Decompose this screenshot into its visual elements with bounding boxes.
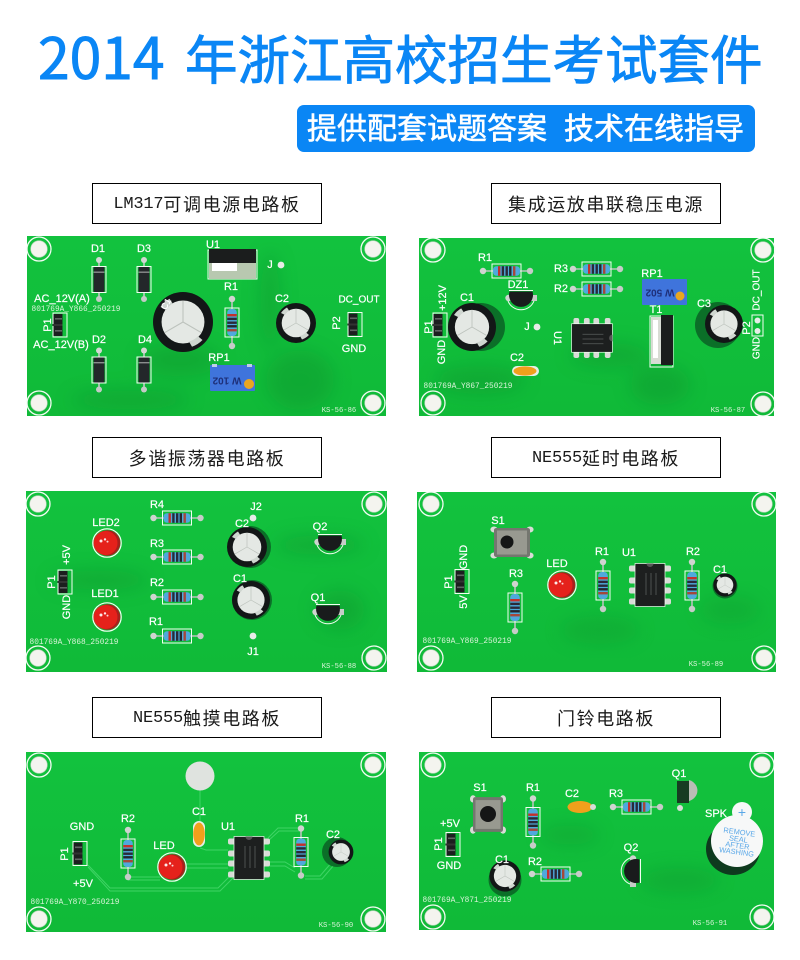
LED2	[92, 517, 121, 557]
timer U1	[221, 821, 270, 880]
board	[419, 752, 774, 930]
resistor R4	[150, 499, 204, 525]
panel: multivibrator	[26, 438, 387, 672]
connector P2	[741, 269, 763, 359]
diode D4: D4	[138, 334, 152, 346]
test point J2: J2	[250, 501, 262, 513]
connector P1	[46, 544, 73, 619]
connector P1	[59, 821, 94, 890]
transistor Q1: Q1	[311, 592, 325, 604]
panel: doorbell	[419, 698, 774, 930]
heading	[492, 184, 720, 224]
board code: 801769A_Y869_250219	[423, 638, 512, 646]
capacitor C1	[232, 573, 272, 620]
resistor R1	[149, 616, 204, 643]
transistor Q1	[672, 768, 697, 811]
diode D3: D3	[137, 243, 151, 255]
switch S1: S1	[473, 782, 487, 794]
touch pad	[186, 762, 214, 790]
heading: NE555触摸电路板	[133, 705, 281, 731]
LED	[546, 558, 576, 599]
panel: op-amp regulator	[419, 184, 775, 416]
LED: LED	[153, 840, 175, 852]
connector P1: P1	[42, 318, 54, 332]
connector P1: AC_12V(A)	[34, 293, 90, 305]
resistor R1	[478, 252, 533, 278]
test point J	[267, 259, 284, 271]
board code: 801769A_Y867_250219	[424, 383, 513, 391]
diode D1	[91, 243, 106, 302]
capacitor C2: C2	[510, 352, 524, 364]
capacitor C1: C1	[159, 297, 173, 311]
capacitor C1	[488, 854, 522, 896]
heading	[492, 698, 720, 738]
resistor R1: R1	[224, 281, 238, 293]
test point J1: J1	[247, 646, 259, 658]
board code: 801769A_Y866_250219	[32, 306, 121, 314]
connector P1	[423, 284, 449, 364]
resistor R3: R3	[509, 568, 523, 580]
resistor R3	[508, 568, 523, 634]
heading	[92, 698, 322, 738]
connector P1: +12V	[437, 284, 449, 311]
connector P1: GND	[436, 340, 448, 364]
timer U1: U1	[622, 547, 636, 559]
capacitor C2	[275, 293, 316, 343]
op-amp U1	[551, 318, 612, 358]
connector P1: GND	[437, 860, 461, 872]
test point J: J	[267, 259, 273, 271]
connector P2: GND	[342, 343, 366, 355]
diode D4	[137, 334, 152, 392]
board code: 801769A_Y868_250219	[30, 639, 119, 647]
board	[419, 238, 775, 416]
buzzer SPK: SEAL	[728, 833, 748, 845]
connector P1: AC_12V(B)	[33, 339, 89, 351]
trimmer RP1: W 102	[212, 374, 241, 386]
connector P1: GND	[458, 545, 470, 569]
trimmer RP1: W 502	[645, 286, 674, 298]
LED1: LED1	[91, 588, 119, 600]
capacitor C2: C2	[326, 829, 340, 841]
connector P1: 5V	[458, 595, 470, 609]
diode D2	[92, 334, 106, 392]
connector P1	[443, 545, 470, 609]
capacitor C2	[227, 518, 271, 568]
capacitor C1: C1	[192, 806, 206, 818]
heading: 多谐振荡器电路板	[129, 445, 285, 471]
connector P1: P1	[46, 575, 58, 589]
test point J2	[250, 501, 262, 521]
connector P2	[331, 294, 380, 355]
capacitor C2: C2	[565, 788, 579, 800]
switch S1	[490, 515, 534, 558]
LED1	[91, 588, 121, 631]
resistor R1: R1	[595, 546, 609, 558]
connector P1: P1	[59, 847, 71, 861]
resistor R1	[595, 546, 610, 612]
test point J	[524, 321, 540, 333]
connector P1	[433, 818, 461, 872]
connector P1: GND	[70, 821, 94, 833]
capacitor C1	[712, 564, 738, 598]
board	[26, 491, 387, 672]
trimmer RP1	[208, 352, 255, 391]
diode D3	[137, 243, 151, 302]
connector P1: +5V	[61, 544, 73, 565]
trimmer RP1: RP1	[641, 268, 663, 280]
capacitor C1: C1	[233, 573, 247, 585]
model code: KS-56-88	[322, 663, 356, 671]
model code: KS-56-87	[711, 407, 745, 415]
resistor R1	[224, 281, 239, 349]
resistor R3	[554, 262, 623, 276]
resistor R1: R1	[478, 252, 492, 264]
heading: NE555延时电路板	[532, 445, 680, 471]
buzzer SPK	[705, 802, 763, 875]
resistor R2: R2	[121, 813, 135, 825]
connector P2: DC_OUT	[752, 269, 762, 311]
title: 2014	[38, 14, 165, 96]
capacitor C3: C3	[697, 298, 711, 310]
resistor R2: R2	[528, 856, 542, 868]
capacitor C2: C2	[235, 518, 249, 530]
connector P1	[33, 293, 90, 351]
resistor R2	[150, 577, 204, 604]
resistor R2	[528, 856, 582, 881]
resistor R1	[526, 782, 540, 849]
resistor R3	[150, 538, 204, 564]
buzzer SPK: SPK	[705, 808, 728, 820]
panel: NE555 touch	[26, 698, 386, 932]
capacitor C1: C1	[460, 292, 474, 304]
board code: 801769A_Y871_250219	[423, 897, 512, 905]
buzzer SPK: REMOVE	[723, 825, 756, 839]
buzzer SPK: AFTER	[725, 839, 750, 852]
connector P2: DC_OUT	[338, 294, 380, 306]
subtitle banner	[297, 104, 755, 152]
connector P1: P1	[423, 320, 435, 334]
transistor Q2	[621, 842, 640, 887]
test point J1	[247, 633, 259, 658]
heading	[92, 438, 322, 478]
resistor R2: R2	[554, 283, 568, 295]
regulator U1: U1	[206, 239, 220, 251]
transistor Q2	[313, 521, 346, 554]
op-amp U1: U1	[551, 331, 563, 345]
connector P1: GND	[61, 595, 73, 619]
model code: KS-56-91	[693, 920, 727, 928]
capacitor C2	[322, 829, 353, 867]
subtitle banner: 提供配套试题答案	[307, 104, 547, 148]
subtitle banner: 技术在线指导	[564, 104, 744, 148]
timer U1	[622, 547, 671, 606]
trimmer RP1	[641, 268, 687, 305]
switch S1: S1	[491, 515, 505, 527]
zener DZ1	[505, 279, 537, 310]
buzzer SPK: +	[738, 804, 746, 820]
resistor R3: R3	[609, 788, 623, 800]
transistor Q2: Q2	[624, 842, 638, 854]
resistor R2: R2	[686, 546, 700, 558]
capacitor C1: C1	[495, 854, 509, 866]
capacitor C2: C2	[275, 293, 289, 305]
LED: LED	[546, 558, 568, 570]
resistor R3	[609, 788, 663, 814]
LED2: LED2	[92, 517, 120, 529]
transistor Q1	[311, 592, 344, 624]
connector P2: GND	[752, 337, 762, 359]
heading: 门铃电路板	[557, 705, 655, 731]
connector P2: P2	[741, 321, 753, 335]
test point J: J	[524, 321, 530, 333]
capacitor C2	[510, 352, 539, 376]
connector P1: P1	[443, 575, 455, 589]
capacitor C1	[153, 292, 213, 352]
model code: KS-56-86	[322, 407, 356, 415]
regulator U1	[206, 239, 257, 279]
panel: NE555 delay	[417, 438, 776, 672]
transistor Q1: Q1	[672, 768, 686, 780]
capacitor C2	[565, 788, 596, 813]
resistor R1: R1	[526, 782, 540, 794]
capacitor C3	[695, 298, 743, 348]
transistor T1: T1	[650, 304, 662, 316]
resistor R1	[294, 813, 309, 879]
switch S1	[470, 782, 506, 834]
resistor R1: R1	[295, 813, 309, 825]
board	[417, 492, 776, 672]
model code: KS-56-90	[319, 922, 353, 930]
trimmer RP1: RP1	[208, 352, 230, 364]
heading: 集成运放串联稳压电源	[508, 191, 704, 217]
connector P1: P1	[433, 837, 445, 851]
board code: 801769A_Y870_250219	[31, 899, 120, 907]
diode D2: D2	[92, 334, 106, 346]
resistor R2: R2	[150, 577, 164, 589]
copper traces	[88, 790, 334, 891]
zener DZ1: DZ1	[508, 279, 528, 291]
connector P1: +5V	[440, 818, 461, 830]
capacitor C1	[192, 806, 206, 847]
model code: KS-56-89	[689, 661, 723, 669]
LED	[153, 840, 186, 881]
resistor R3: R3	[554, 263, 568, 275]
resistor R1: R1	[149, 616, 163, 628]
capacitor C1	[448, 292, 505, 351]
connector P2: P2	[331, 316, 343, 330]
buzzer SPK: WASHING	[719, 845, 755, 859]
diode D1: D1	[91, 243, 105, 255]
transistor T1	[650, 304, 673, 367]
heading	[92, 184, 322, 224]
resistor R2	[685, 546, 700, 612]
panel: LM317	[27, 184, 386, 416]
connector P1: +5V	[73, 878, 94, 890]
heading	[492, 438, 720, 478]
heading: LM317可调电源电路板	[113, 191, 301, 217]
resistor R4: R4	[150, 499, 164, 511]
timer U1: U1	[221, 821, 235, 833]
title: 年浙江高校招生考试套件	[185, 19, 763, 95]
resistor R2	[554, 282, 623, 296]
resistor R2	[121, 813, 135, 880]
resistor R3: R3	[150, 538, 164, 550]
board	[27, 236, 386, 416]
board	[26, 752, 386, 932]
capacitor C1: C1	[713, 564, 727, 576]
transistor Q2: Q2	[313, 521, 327, 533]
